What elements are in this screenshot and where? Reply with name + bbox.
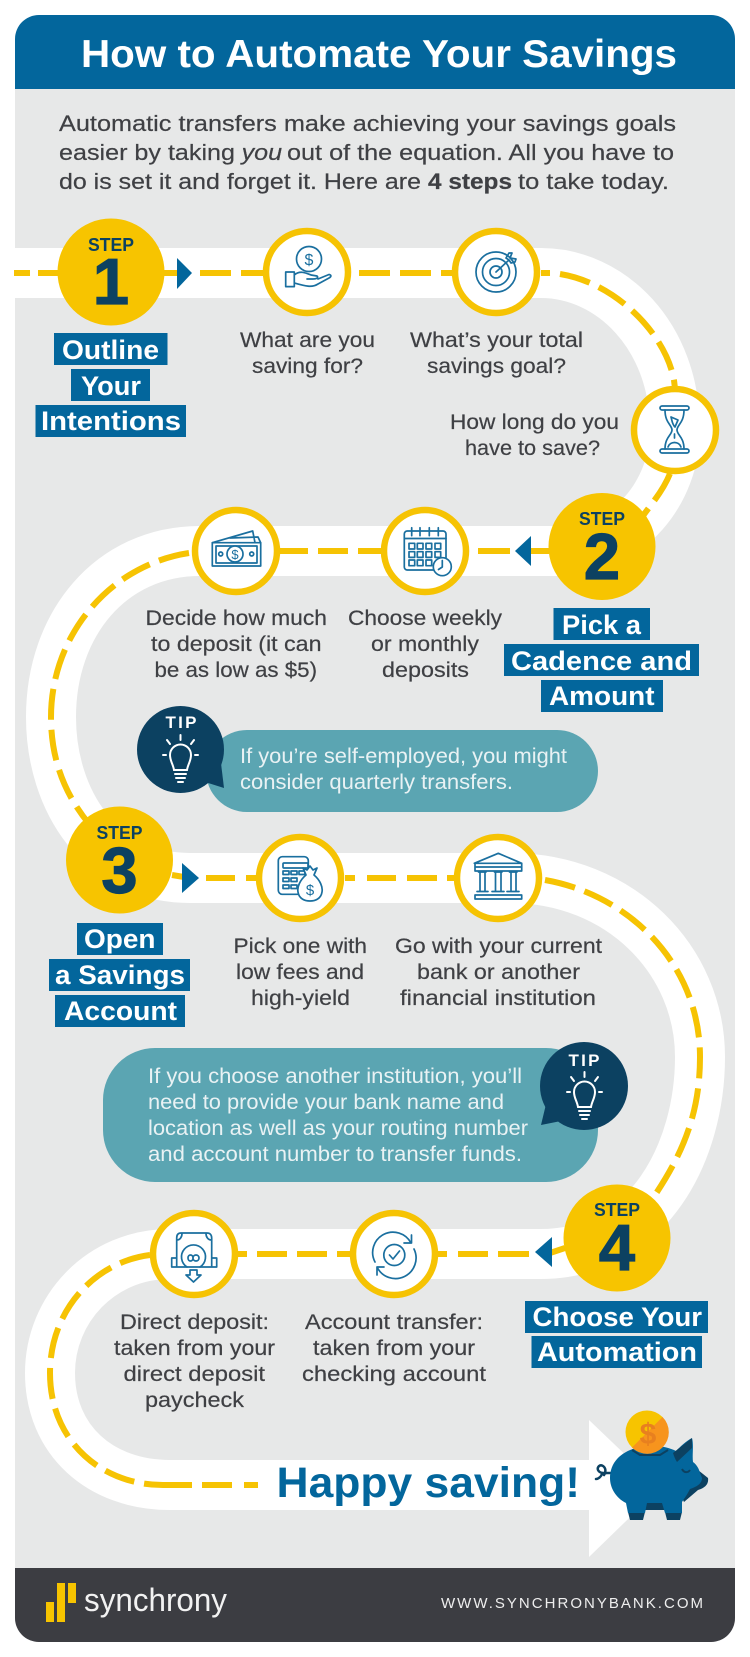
instruction: cadence: or monthly bbox=[371, 632, 479, 656]
instruction: low fees bbox=[234, 934, 367, 1010]
instruction: account transfer: checking account bbox=[302, 1362, 486, 1386]
circle icon: direct deposit bbox=[153, 1213, 235, 1295]
tip callout 2: location as well as your routing number bbox=[148, 1116, 528, 1140]
step 1 heading: Intentions bbox=[41, 406, 181, 436]
question: how long: How long do you bbox=[450, 410, 619, 434]
question: how long bbox=[450, 410, 619, 460]
circle icon: banknotes bbox=[195, 510, 277, 592]
tip callout 1 bbox=[137, 706, 598, 812]
instruction: direct deposit bbox=[114, 1310, 275, 1412]
question: what are you saving for: saving for? bbox=[252, 354, 363, 378]
instruction: cadence: Choose weekly bbox=[348, 606, 502, 630]
circle icon: hand with coin: $ bbox=[305, 252, 314, 269]
question: what are you saving for: What are you bbox=[240, 328, 375, 352]
road: white winding path with end arrow bbox=[10, 273, 700, 1557]
instruction: direct deposit: paycheck bbox=[145, 1388, 244, 1412]
circle icon: calculator and money bag bbox=[259, 837, 341, 919]
intro text: out of the equation. All you have to bbox=[287, 140, 674, 165]
instruction: choose institution: financial institution bbox=[400, 986, 596, 1010]
instruction: direct deposit: Direct deposit: bbox=[120, 1310, 269, 1334]
step 1 badge bbox=[58, 218, 164, 326]
instruction: how much to deposit: be as low as $5) bbox=[154, 658, 317, 682]
intro text: you bbox=[239, 140, 283, 165]
step 3 badge bbox=[66, 806, 173, 914]
circle icon: bank building bbox=[457, 837, 539, 919]
step 2 badge: STEP bbox=[579, 509, 625, 529]
tip callout 2 bbox=[103, 1042, 628, 1182]
step 1 heading bbox=[36, 333, 186, 437]
step 4 heading: Automation bbox=[537, 1337, 697, 1367]
instruction: low fees: high-yield bbox=[251, 986, 350, 1010]
circle icon: account transfer bbox=[353, 1213, 435, 1295]
step 3 heading: a Savings bbox=[55, 960, 185, 990]
step 3 badge: 3 bbox=[101, 834, 138, 907]
road: dashed yellow centre line bbox=[14, 273, 700, 1485]
question: how long: have to save? bbox=[465, 436, 600, 460]
step 2 heading: Amount bbox=[549, 681, 655, 711]
step 1 badge: 1 bbox=[93, 245, 129, 318]
step 1 heading: Outline bbox=[62, 335, 159, 365]
instruction: account transfer: taken from your bbox=[313, 1336, 475, 1360]
circle icon: calculator and money bag: $ bbox=[306, 882, 315, 899]
step 4 badge bbox=[564, 1184, 670, 1292]
footer band bbox=[15, 1568, 735, 1642]
circle icon: calendar bbox=[384, 510, 466, 592]
closing message: Happy saving! bbox=[276, 1459, 580, 1507]
step 4 badge: STEP bbox=[594, 1200, 640, 1220]
header band bbox=[15, 15, 735, 89]
instruction: cadence bbox=[348, 606, 502, 682]
website url: WWW.SYNCHRONYBANK.COM bbox=[441, 1595, 703, 1612]
tip callout 2: If you choose another institution, you’ll bbox=[148, 1064, 522, 1088]
instruction: how much to deposit bbox=[146, 606, 327, 682]
title: How to Automate Your Savings bbox=[81, 33, 677, 76]
intro text bbox=[59, 111, 676, 194]
circle icon: hand with coin bbox=[266, 231, 348, 313]
step 2 badge bbox=[548, 493, 656, 600]
intro text: Automatic transfers make achieving your savings goals bbox=[59, 111, 676, 136]
instruction: choose institution: bank or another bbox=[417, 960, 580, 984]
step 3 badge: STEP bbox=[96, 823, 142, 843]
step 2 heading: Cadence and bbox=[511, 646, 692, 676]
step 1 heading: Your bbox=[81, 371, 141, 401]
logo: synchrony: synchrony bbox=[84, 1582, 227, 1618]
step 2 badge: 2 bbox=[584, 520, 620, 593]
instruction: low fees: low fees and bbox=[236, 960, 364, 984]
instruction: cadence: deposits bbox=[382, 658, 469, 682]
icon: piggy bank with coin: $ bbox=[640, 1418, 657, 1451]
instruction: direct deposit: taken from your bbox=[114, 1336, 275, 1360]
question: total savings goal bbox=[410, 328, 583, 378]
tip callout 1: consider quarterly transfers. bbox=[240, 770, 513, 794]
question: total savings goal: What’s your total bbox=[410, 328, 583, 352]
step 3 heading: Open bbox=[84, 924, 156, 954]
arrowheads along the road bbox=[177, 258, 552, 1267]
instruction: low fees: Pick one with bbox=[234, 934, 367, 958]
tip callout 1: TIP bbox=[166, 713, 196, 732]
question: total savings goal: savings goal? bbox=[427, 354, 566, 378]
instruction: account transfer bbox=[302, 1310, 486, 1386]
step 2 heading: Pick a bbox=[562, 610, 641, 640]
intro text: easier by taking bbox=[59, 140, 235, 165]
intro text: 4 steps bbox=[428, 169, 512, 194]
instruction: choose institution bbox=[395, 934, 602, 1010]
instruction: direct deposit: direct deposit bbox=[124, 1362, 265, 1386]
intro text: to take today. bbox=[518, 169, 669, 194]
tip callout 1: If you’re self-employed, you might bbox=[240, 744, 567, 768]
instruction: choose institution: Go with your current bbox=[395, 934, 602, 958]
step 3 heading bbox=[49, 923, 190, 1027]
instruction: how much to deposit: Decide how much bbox=[146, 606, 327, 630]
instruction: how much to deposit: to deposit (it can bbox=[151, 632, 322, 656]
instruction: account transfer: Account transfer: bbox=[305, 1310, 483, 1334]
step 4 heading bbox=[525, 1301, 708, 1368]
intro text: do is set it and forget it. Here are bbox=[59, 169, 421, 194]
question: what are you saving for bbox=[240, 328, 375, 378]
tip callout 2: need to provide your bank name and bbox=[148, 1090, 504, 1114]
step 1 badge: STEP bbox=[88, 235, 134, 255]
circle icon: hourglass bbox=[634, 389, 716, 471]
step 4 badge: 4 bbox=[599, 1211, 635, 1284]
tip callout 2: and account number to transfer funds. bbox=[148, 1142, 522, 1166]
step 2 heading bbox=[504, 608, 699, 712]
step 4 heading: Choose Your bbox=[532, 1302, 702, 1332]
tip callout 2: TIP bbox=[568, 1051, 600, 1070]
icon: piggy bank with coin bbox=[596, 1410, 708, 1520]
circle icon: banknotes: $ bbox=[231, 547, 239, 562]
circle icon: target bbox=[455, 231, 537, 313]
step 3 heading: Account bbox=[64, 996, 177, 1026]
